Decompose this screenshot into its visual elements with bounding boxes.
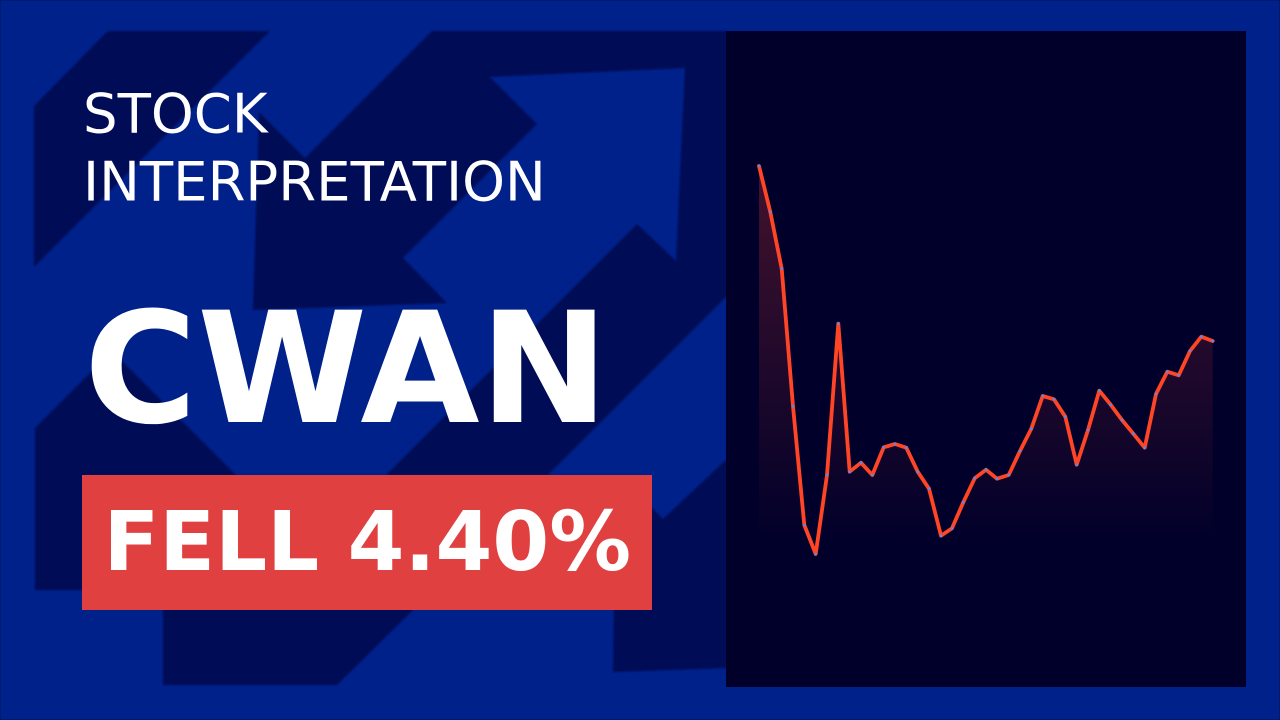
heading: stock interpretation <box>83 82 546 214</box>
heading: stock interpretation: STOCK <box>83 82 269 146</box>
price line <box>759 166 1213 554</box>
callout: fell 4.40% <box>82 475 652 610</box>
callout: fell 4.40%: FELL 4.40% <box>104 495 631 590</box>
heading: stock interpretation: INTERPRETATION <box>83 150 546 214</box>
data point markers <box>758 165 1214 555</box>
background arrow pattern <box>34 31 727 685</box>
area under line <box>759 166 1213 560</box>
ticker: CWAN: CWAN <box>84 280 609 459</box>
panel: price chart <box>726 31 1246 687</box>
